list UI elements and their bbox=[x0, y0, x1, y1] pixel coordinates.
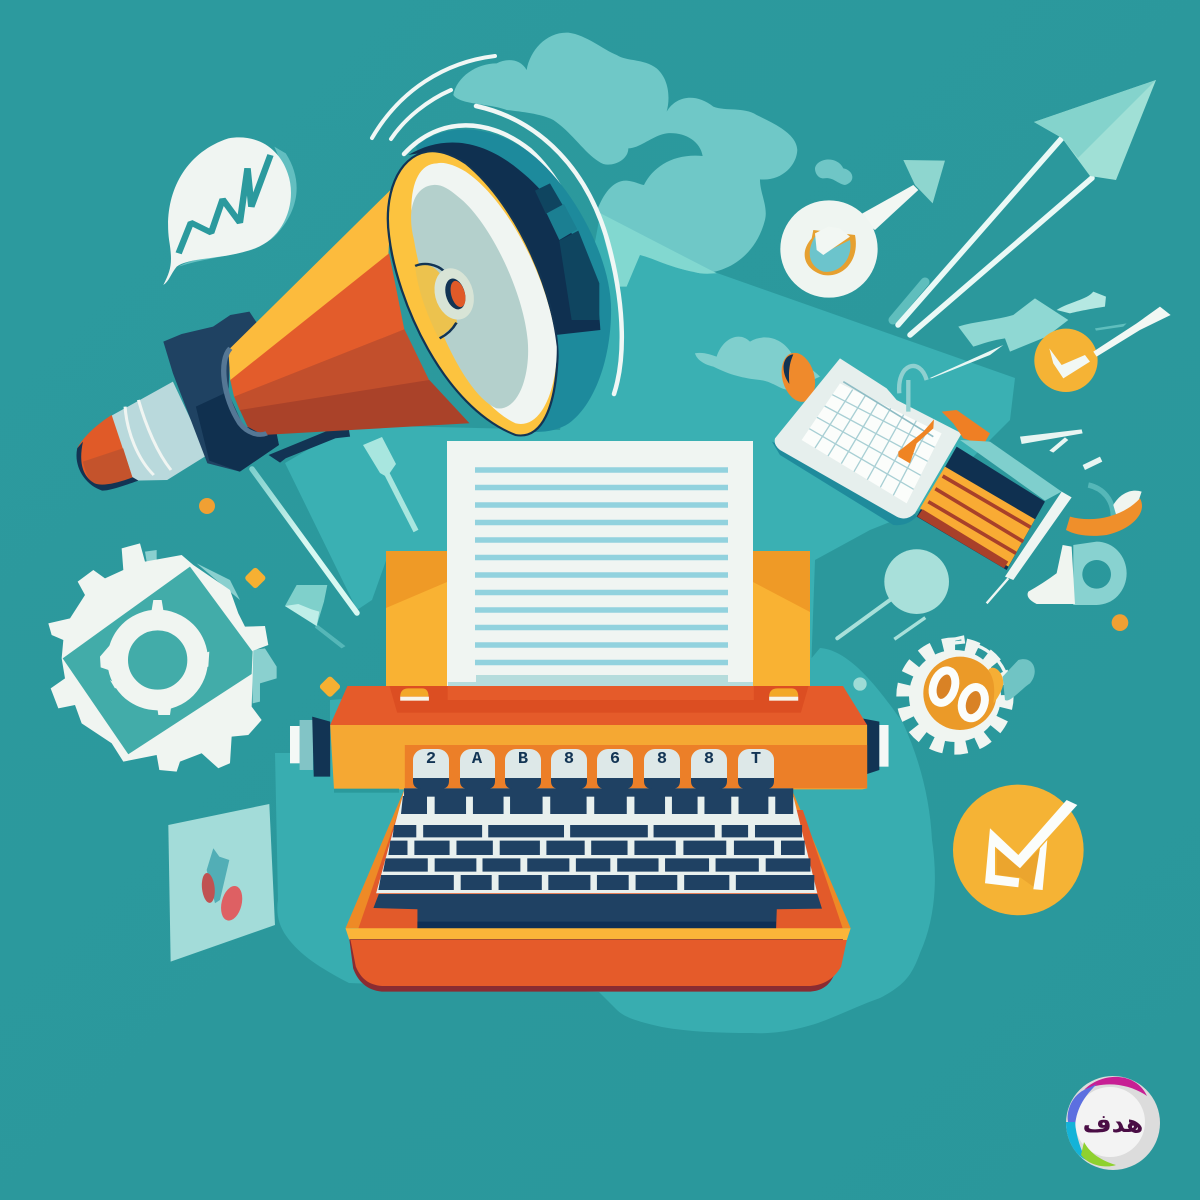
bubble bbox=[163, 137, 291, 285]
key 8: T bbox=[751, 750, 761, 769]
handle end shade bbox=[83, 448, 133, 488]
logo face bbox=[1075, 1087, 1145, 1157]
cloud behind megaphone bbox=[453, 33, 797, 287]
upper lighter backdrop bbox=[285, 215, 1015, 700]
carriage band bbox=[330, 725, 867, 789]
cone yellow bbox=[228, 188, 392, 381]
arrowhead fold bbox=[1034, 80, 1156, 158]
cog arcs bbox=[948, 637, 1007, 677]
light beam bbox=[597, 212, 717, 287]
speaker centre bbox=[448, 280, 468, 308]
paper scrap bbox=[285, 585, 327, 626]
white wedge bbox=[929, 345, 1003, 378]
speaker arcs bbox=[415, 264, 456, 338]
tape ring bbox=[1073, 542, 1127, 605]
teal segment bbox=[547, 204, 577, 240]
pin head bbox=[363, 437, 396, 477]
panel shadow bbox=[772, 442, 917, 525]
lower lighter backdrop bbox=[275, 648, 935, 1033]
row three bbox=[388, 841, 805, 855]
handle end cap bbox=[76, 442, 138, 491]
note red mark bbox=[200, 872, 216, 904]
top band bbox=[404, 788, 793, 797]
gear ring teeth bbox=[100, 600, 209, 715]
calendar grid bbox=[802, 383, 942, 503]
cone mid red bbox=[234, 329, 429, 411]
clipboard bbox=[775, 358, 962, 519]
pale streak bbox=[1095, 323, 1127, 331]
frame side bbox=[1005, 492, 1072, 580]
tab top bbox=[769, 688, 798, 697]
gear and page icons bbox=[48, 543, 344, 962]
knob body bbox=[312, 717, 330, 777]
key caps bbox=[413, 749, 774, 789]
logo badge bbox=[1066, 1076, 1160, 1170]
keyboard frame bbox=[345, 788, 851, 928]
orange dot left bbox=[199, 498, 215, 514]
large arrow shafts bbox=[898, 138, 1092, 335]
white blob bbox=[1028, 545, 1075, 604]
navy oval cap bbox=[784, 354, 793, 384]
row one bbox=[401, 796, 793, 814]
cone base ring bbox=[224, 348, 267, 435]
cloud body bbox=[453, 33, 797, 273]
right knob bbox=[862, 718, 889, 775]
right cluster bbox=[695, 292, 1127, 390]
paper support bbox=[386, 551, 810, 692]
handle stripes bbox=[125, 400, 171, 475]
blue arc bbox=[1068, 1084, 1097, 1130]
small dot bbox=[853, 677, 867, 691]
key 6 bbox=[644, 749, 680, 789]
small arrowhead bbox=[903, 160, 945, 203]
key 2 bbox=[460, 749, 495, 789]
calendar top line bbox=[843, 382, 933, 437]
check right leg bbox=[1033, 840, 1047, 890]
carriage shadow bbox=[334, 789, 399, 793]
note teal mark bbox=[207, 848, 229, 903]
check badge inner bbox=[810, 237, 850, 272]
bubble chart line bbox=[179, 155, 270, 253]
note page bbox=[168, 804, 275, 962]
key 7 bbox=[691, 749, 727, 789]
knob cap bbox=[879, 725, 889, 767]
bubble shadow bbox=[179, 147, 297, 267]
cone dark red bbox=[240, 380, 469, 435]
cone orange bbox=[230, 253, 404, 397]
torn cloud top bbox=[1057, 292, 1106, 313]
note red dot bbox=[218, 884, 246, 923]
check badge bbox=[780, 200, 878, 298]
dark segment bbox=[535, 183, 564, 214]
cog face bbox=[923, 657, 997, 730]
key 5: 6 bbox=[610, 750, 620, 769]
yellow check badge bbox=[1034, 329, 1098, 392]
paper lower tint bbox=[448, 675, 753, 700]
large arrow bbox=[893, 80, 1156, 335]
knob body bbox=[862, 718, 879, 775]
key 3: B bbox=[518, 750, 528, 769]
speech bubble bbox=[163, 137, 297, 285]
check letter fill bbox=[997, 848, 1040, 887]
gear light flecks bbox=[145, 550, 277, 703]
dark panel bbox=[917, 447, 1045, 570]
crescent orange bbox=[1066, 498, 1142, 536]
handle orange end bbox=[77, 415, 133, 488]
megaphone navy ring bbox=[408, 143, 600, 335]
carriage tab bbox=[769, 688, 798, 701]
space bar bbox=[373, 894, 822, 930]
tab top bbox=[400, 688, 429, 697]
diagonal line bbox=[252, 469, 357, 613]
orange stripes bbox=[920, 467, 1035, 567]
bell white bbox=[411, 163, 557, 424]
tab base bbox=[769, 697, 798, 701]
paper text lines bbox=[475, 470, 728, 662]
hook bbox=[1088, 485, 1113, 517]
short line bbox=[894, 618, 925, 639]
body shadow bbox=[349, 939, 843, 992]
megaphone back ring bbox=[416, 129, 611, 432]
megaphone bbox=[76, 129, 611, 491]
orange oval bbox=[776, 349, 820, 406]
key 4 bbox=[551, 749, 587, 789]
carriage top bbox=[330, 686, 867, 725]
cyan arc bbox=[1066, 1122, 1086, 1160]
paper bbox=[447, 441, 753, 701]
scrap handle bbox=[316, 625, 344, 647]
key 4: 8 bbox=[564, 750, 574, 769]
key 3 bbox=[505, 749, 541, 789]
first zero bbox=[929, 668, 959, 706]
lower segment bbox=[559, 231, 599, 320]
body bbox=[350, 940, 847, 986]
key 6: 8 bbox=[657, 750, 667, 769]
orange tab bbox=[942, 410, 990, 445]
gear panel bbox=[63, 567, 253, 754]
small cloud bbox=[815, 160, 852, 185]
body lip bbox=[345, 928, 851, 940]
rim bbox=[388, 151, 558, 435]
row two bbox=[393, 825, 802, 837]
logo text: هدف bbox=[1083, 1110, 1143, 1138]
carriage inset bbox=[390, 686, 809, 713]
cog and check icons bbox=[853, 637, 1084, 915]
clip bbox=[899, 366, 927, 412]
key 8 bbox=[738, 749, 774, 789]
knob cap bbox=[290, 726, 301, 763]
knob collar bbox=[300, 720, 313, 770]
cog bbox=[909, 650, 1001, 742]
small torn paper bbox=[285, 585, 344, 647]
calendar cluster bbox=[772, 307, 1171, 639]
gear bbox=[48, 543, 268, 772]
needle bbox=[987, 578, 1008, 603]
ring segments bbox=[535, 183, 599, 320]
orange diamond bbox=[244, 567, 267, 589]
cog teeth bbox=[905, 646, 1005, 746]
left cloud bbox=[695, 337, 820, 390]
tab base bbox=[400, 697, 429, 701]
support light right bbox=[753, 582, 810, 692]
speaker dome bbox=[415, 265, 457, 338]
speaker hole bbox=[442, 277, 468, 311]
large arrowhead bbox=[1034, 80, 1156, 180]
space bar shade bbox=[417, 922, 776, 930]
support right bbox=[753, 551, 810, 692]
key rows bbox=[373, 788, 822, 930]
check circle bbox=[953, 785, 1084, 915]
carriage recess bbox=[405, 745, 867, 788]
trigger bracket bbox=[269, 430, 350, 463]
speaker ring bbox=[429, 265, 479, 323]
magnifier handle bbox=[837, 600, 890, 638]
orange tick bbox=[898, 419, 934, 463]
keyboard well bbox=[358, 810, 843, 929]
paper scrap highlight bbox=[285, 604, 319, 626]
second zero bbox=[958, 684, 989, 721]
key 2: A bbox=[472, 750, 483, 769]
orange dot bbox=[1112, 614, 1128, 631]
page pin bbox=[363, 437, 416, 531]
collar bbox=[163, 312, 279, 472]
check badge ring bbox=[805, 230, 856, 275]
gear ring bbox=[118, 620, 198, 700]
stripe lines bbox=[928, 476, 1031, 553]
yellow badge tick bbox=[1049, 307, 1171, 378]
row four bbox=[383, 858, 810, 872]
frame top bbox=[960, 440, 1062, 501]
key 1 bbox=[413, 749, 449, 789]
teal smudge bbox=[1003, 659, 1035, 701]
bell grey bbox=[411, 185, 528, 408]
pin stem bbox=[386, 472, 416, 531]
row five bbox=[378, 875, 814, 890]
magenta arc bbox=[1084, 1077, 1147, 1096]
crescent white bbox=[1113, 491, 1142, 517]
small arrow badge bbox=[780, 160, 945, 298]
check badge tick bbox=[815, 227, 850, 255]
typewriter bbox=[290, 441, 889, 992]
cog highlight bbox=[988, 668, 1003, 703]
small arrow shaft bbox=[857, 185, 918, 230]
megaphone sound arcs bbox=[372, 56, 622, 397]
left knob bbox=[290, 717, 330, 777]
orange diamond bbox=[319, 675, 341, 698]
torn cloud bbox=[958, 298, 1068, 352]
marks bbox=[1020, 429, 1102, 470]
carriage tab bbox=[400, 688, 429, 701]
key 1: 2 bbox=[426, 750, 436, 769]
magnifier bbox=[884, 549, 949, 614]
support left bbox=[386, 551, 447, 692]
green arc bbox=[1081, 1142, 1116, 1166]
key bed bbox=[376, 788, 817, 893]
support light left bbox=[386, 582, 447, 692]
key 7: 8 bbox=[704, 750, 714, 769]
collar shade bbox=[196, 393, 279, 472]
check mark bbox=[985, 800, 1077, 887]
calendar lines bbox=[809, 390, 935, 495]
key 5 bbox=[597, 749, 633, 789]
logo disc bbox=[1066, 1076, 1160, 1170]
strip behind shaft bbox=[893, 282, 925, 320]
panel bottom bbox=[917, 509, 1008, 568]
handle tube bbox=[110, 382, 207, 481]
